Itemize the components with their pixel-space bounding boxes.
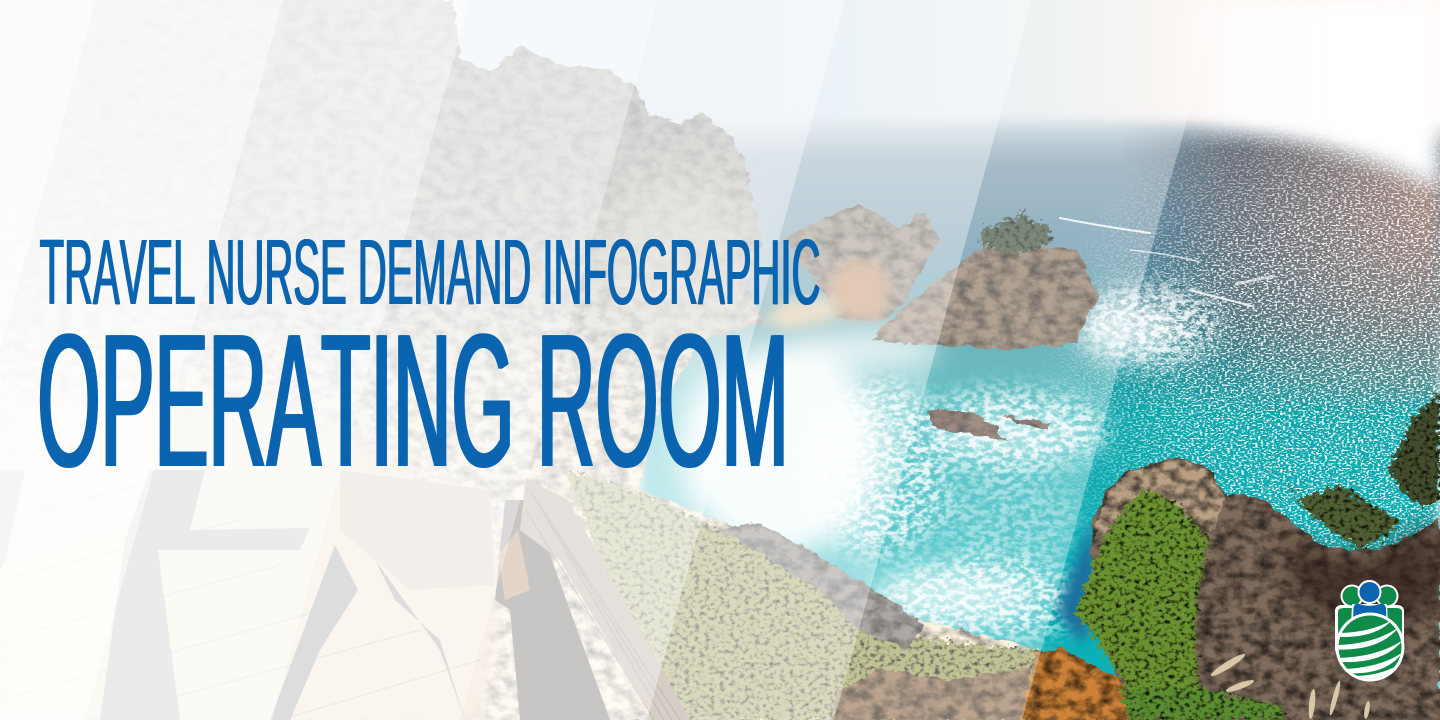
top right tree: [1388, 392, 1440, 508]
bench beam: [340, 470, 495, 590]
railing: [495, 478, 690, 720]
sun glare: [1160, 0, 1440, 190]
side figures: [1338, 586, 1402, 650]
title: travel nurse demand infographic: TRAVEL NURSE DEMAND INFOGRAPHIC: [39, 220, 820, 324]
brown ground: [830, 668, 1030, 720]
back island: [762, 203, 940, 330]
pampas grass: [1209, 651, 1371, 719]
green tree: [1075, 488, 1209, 712]
stack trees: [980, 210, 1052, 252]
orange rock: [830, 260, 890, 320]
deep water beside cliff: [1056, 520, 1100, 645]
ocean sparkle: [1041, 128, 1440, 600]
bottom ground base: [620, 690, 1440, 720]
low shrubs: [1120, 688, 1285, 720]
center figure: [1358, 580, 1382, 604]
striped globe: [1336, 612, 1404, 682]
plank seams: [0, 470, 480, 720]
surf foam: [810, 283, 1220, 642]
main sea stack: [871, 210, 1100, 350]
logo: nurses and striped globe: [1335, 580, 1404, 682]
ocean: [640, 120, 1440, 720]
logo white outline: [1335, 580, 1404, 655]
railing top plank: [520, 478, 690, 720]
cypress tree: [1282, 392, 1440, 548]
cliff shadow: [1280, 520, 1440, 640]
upper rock face: [1092, 458, 1226, 540]
hillside rocks: [718, 525, 925, 650]
tide pool rocks: [926, 409, 1052, 442]
forested headland and path: [0, 0, 1120, 720]
wave streaks: [1060, 218, 1274, 306]
right cliff: [1090, 456, 1440, 720]
sand beach: [762, 296, 838, 330]
boardwalk planks: [0, 400, 500, 720]
land base under headland: [0, 0, 640, 720]
hillside grass: [565, 470, 1040, 720]
pale rock face: [600, 180, 760, 340]
sky: [0, 0, 1440, 200]
boardwalk shadows: [0, 470, 465, 720]
orange dirt bank: [1020, 648, 1160, 720]
bright surf: [680, 302, 1180, 623]
heading: operating room: OPERATING ROOM: [36, 295, 787, 507]
